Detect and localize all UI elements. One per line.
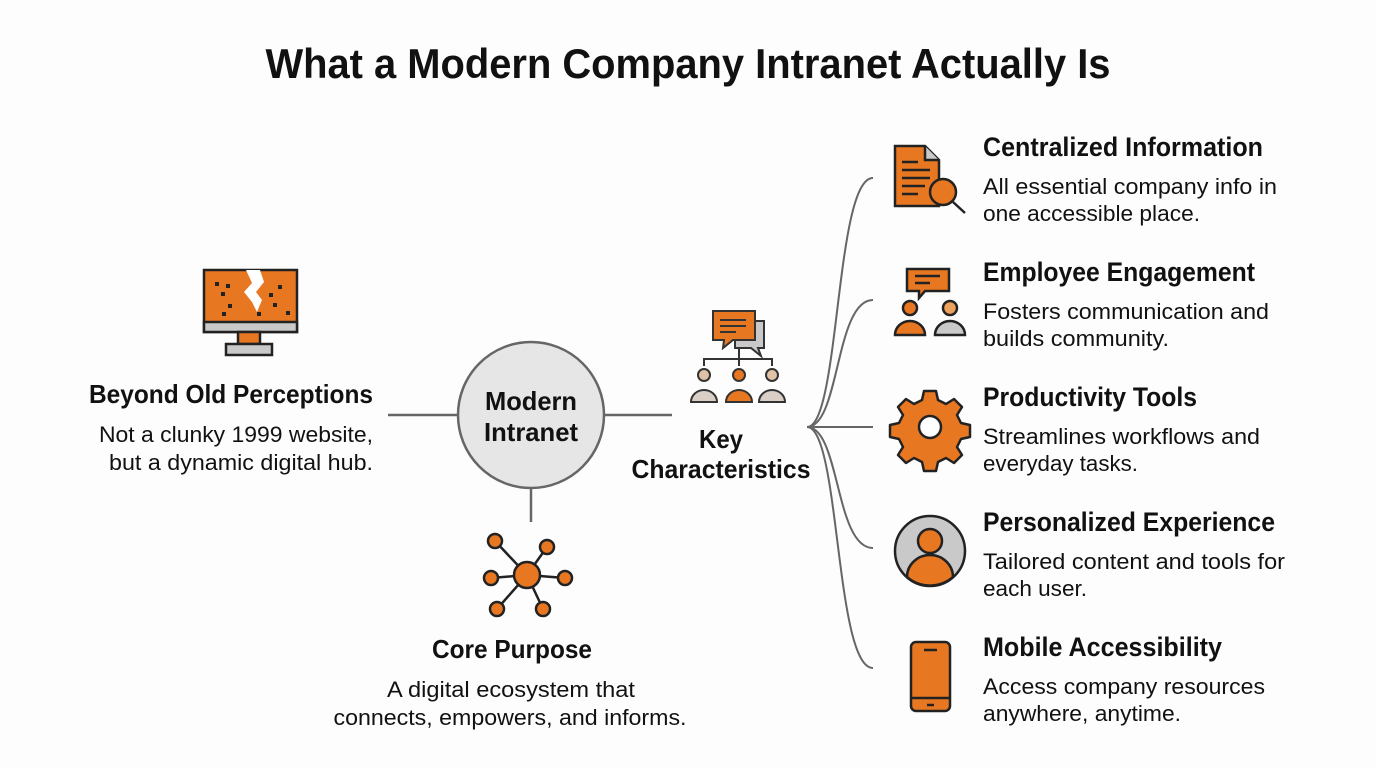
central circle: Modern Intranet — [458, 342, 604, 488]
text: Employee Engagement: Employee Engagement — [983, 257, 1255, 287]
text: Beyond Old Perceptions: Beyond Old Perceptions — [89, 379, 373, 409]
text: Key Characteristics: Characteristics — [632, 454, 810, 484]
central circle: Modern Intranet: Modern — [485, 386, 577, 416]
text: Centralized Information: All essential company info in — [983, 174, 1277, 199]
text: Centralized Information: one accessible place. — [983, 201, 1200, 226]
text: Mobile Accessibility: Access company resources — [983, 674, 1265, 699]
text: Employee Engagement: builds community. — [983, 326, 1169, 351]
branch curves — [807, 178, 873, 668]
text: Productivity Tools: Streamlines workflows and — [983, 424, 1260, 449]
text: Core Purpose: A digital ecosystem that — [387, 677, 635, 702]
text: Mobile Accessibility — [983, 632, 1265, 726]
text: Mobile Accessibility: anywhere, anytime. — [983, 701, 1181, 726]
text: Productivity Tools — [983, 382, 1260, 476]
icon: employee engagement — [895, 269, 965, 335]
text: Centralized Information — [983, 132, 1277, 226]
text: Employee Engagement — [983, 257, 1269, 351]
text: Productivity Tools: everyday tasks. — [983, 451, 1138, 476]
text: Core Purpose: Core Purpose — [432, 634, 592, 664]
text: Beyond Old Perceptions: Not a clunky 1999 website, — [99, 422, 373, 447]
text: Employee Engagement: Fosters communication and — [983, 299, 1269, 324]
text: Key Characteristics — [632, 424, 810, 484]
text: Beyond Old Perceptions — [89, 379, 373, 475]
text: Personalized Experience: Personalized Experience — [983, 507, 1275, 537]
text: Personalized Experience: each user. — [983, 576, 1087, 601]
icon: mobile phone — [911, 642, 950, 711]
text: Centralized Information: Centralized Information — [983, 132, 1263, 162]
text: Productivity Tools: Productivity Tools — [983, 382, 1197, 412]
icon: gear — [890, 391, 970, 471]
text: Mobile Accessibility: Mobile Accessibility — [983, 632, 1222, 662]
text: Key Characteristics: Key — [699, 424, 743, 454]
connector lines — [388, 415, 672, 522]
icon: key characteristics org chart — [691, 311, 785, 402]
central circle: Modern Intranet: Intranet — [484, 417, 578, 447]
icon: broken monitor — [204, 270, 297, 355]
icon: user profile — [895, 516, 965, 586]
text: Personalized Experience: Tailored content and tools for — [983, 549, 1285, 574]
text: Beyond Old Perceptions: but a dynamic digital hub. — [109, 450, 373, 475]
text: Core Purpose: connects, empowers, and informs. — [334, 705, 686, 730]
text: Core Purpose — [334, 634, 686, 730]
text: Personalized Experience — [983, 507, 1285, 601]
icon: document search — [895, 146, 965, 213]
title: What a Modern Company Intranet Actually Is — [266, 40, 1110, 87]
icon: hub network — [484, 534, 572, 616]
